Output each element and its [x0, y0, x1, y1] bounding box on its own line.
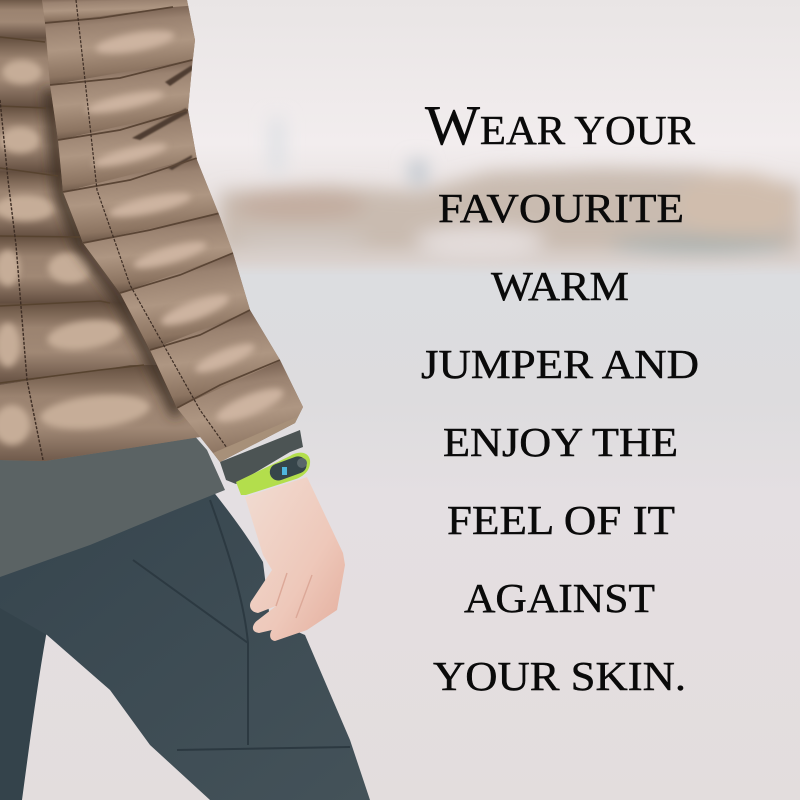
fitness band [236, 453, 310, 495]
line 4: JUMPER AND [421, 341, 699, 387]
line 1: WEAR YOUR [425, 95, 696, 157]
line 5: ENJOY THE [443, 419, 678, 465]
grey sweater [0, 425, 225, 577]
hand [245, 477, 345, 641]
headline text [421, 95, 699, 699]
line 7: AGAINST [464, 575, 655, 621]
quilted jacket sleeve [42, 0, 303, 462]
front leg leggings [0, 490, 370, 800]
back leg [0, 600, 47, 800]
line 2: FAVOURITE [438, 185, 684, 231]
line 8: YOUR SKIN. [433, 653, 686, 699]
quilted jacket body [0, 0, 200, 470]
sweater cuff [220, 430, 303, 484]
line 6: FEEL OF IT [447, 497, 675, 543]
line 3: WARM [491, 263, 629, 309]
